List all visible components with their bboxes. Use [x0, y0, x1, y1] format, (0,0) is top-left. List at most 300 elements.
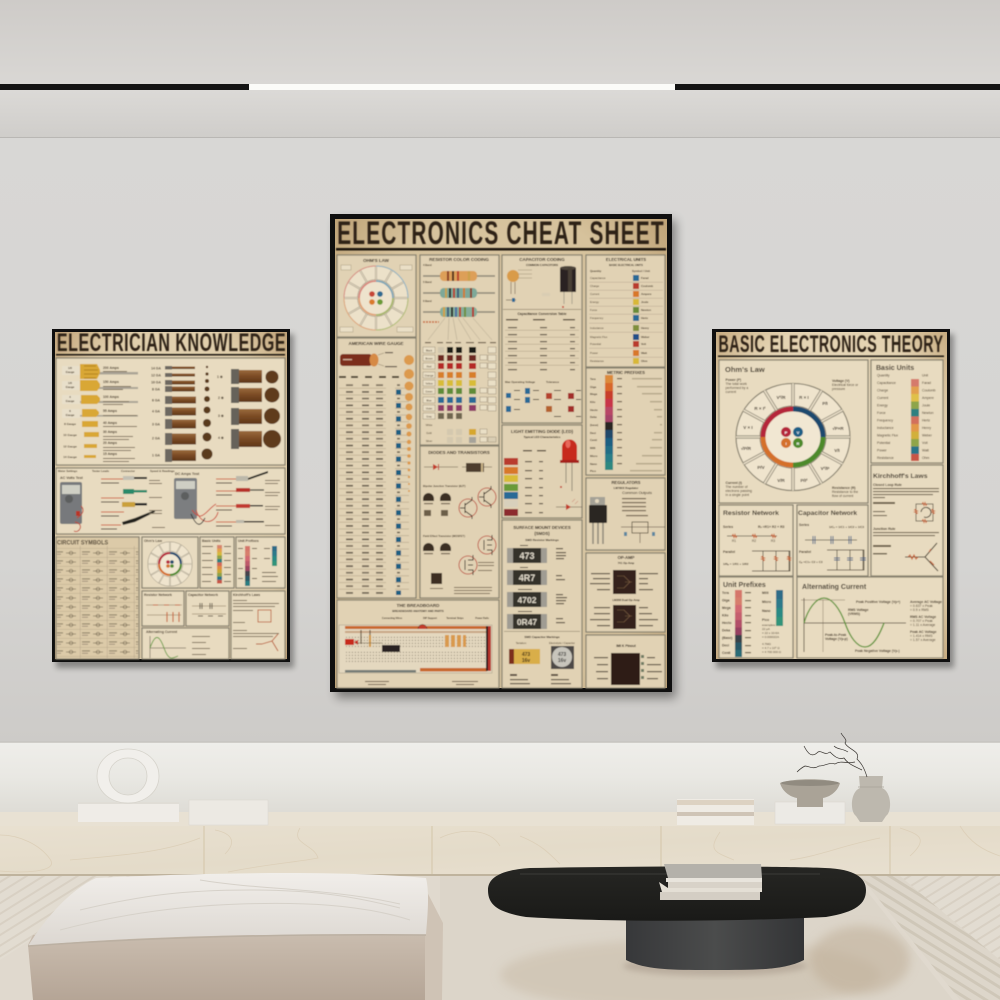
- panel: unit prefixes: = 4.7 x 10⁶ Ω: [762, 646, 780, 650]
- title: BASIC ELECTRONICS THEORY: [718, 331, 944, 358]
- LED: [556, 440, 582, 510]
- panel: metric prefixes: Micro: [590, 454, 598, 458]
- panel: unit prefixes: Giga: [722, 598, 730, 602]
- copper wire gauge column: 8 GA: [152, 388, 161, 392]
- panel: metric prefixes: Kilo: [590, 400, 596, 404]
- panel: electrical units: Hertz: [641, 316, 649, 320]
- panel: LED: [502, 425, 582, 518]
- panel: surface mount devices: SURFACE MOUNT DEVICES: [513, 525, 571, 530]
- panel: LED: LIGHT EMITTING DIODE (LED): [511, 429, 574, 434]
- panel: electrical units: Weber: [641, 335, 650, 339]
- panel: LED: Typical LED Characteristics: [524, 435, 561, 439]
- tantalum capacitor: [509, 649, 540, 664]
- colour table: Red: [427, 364, 432, 368]
- panel: American wire gauge: [337, 338, 416, 598]
- panel: capacitor coding: Capacitance Conversion Table: [517, 312, 567, 316]
- panel: 555 timer: IMI K Pinout: [616, 644, 637, 648]
- panel: unit prefixes: = 0.000022A: [762, 635, 779, 639]
- SMD resistor 4R7: [507, 570, 547, 585]
- panel: surface mount devices: Electrolytic / Capacitor: [549, 641, 575, 645]
- panel: unit prefixes: Pico: [762, 618, 769, 622]
- decor: ring sculpture on marble block: [78, 749, 179, 822]
- panel: capacitor network: Parallel: [799, 550, 811, 554]
- panel: capacitor network: [797, 505, 868, 576]
- TO-220 regulator: [589, 497, 607, 544]
- panel: unit prefixes: Hecto: [722, 621, 731, 625]
- yellow wire column: 14 Gauge: [63, 455, 77, 459]
- panel: capacitor network: Series: [799, 523, 809, 527]
- resistors: [423, 263, 496, 343]
- panel: basic units: [871, 360, 943, 463]
- panel: op-amp: [586, 553, 665, 632]
- panel: electrical units: Watt: [641, 351, 647, 355]
- panel: basic units: Frequency: [877, 418, 893, 422]
- panel: basic units: Ampere: [922, 396, 934, 400]
- panel: diodes and transistors: [420, 446, 499, 598]
- panel: capacitor coding: CAPACITOR CODING: [519, 257, 565, 262]
- panel: capacitor coding: COMMON CAPACITORS: [526, 263, 558, 267]
- panel: capacitor network: Cₚ =C1+ C2 + C3: [799, 560, 823, 564]
- panel: mini alternating current: [142, 628, 229, 659]
- yellow wire column: 40 Amps: [103, 421, 117, 425]
- panel: metric prefixes: Mega: [590, 392, 598, 396]
- yellow wire column: 10 Gauge: [63, 433, 77, 437]
- panel: alternating current: [797, 577, 943, 658]
- colour table: [423, 347, 496, 443]
- panel: Ohm's law: Ohm's Law: [725, 365, 765, 374]
- panel: electrical units: Ampere: [641, 292, 652, 296]
- copper wire gauge column: 6 GA: [152, 398, 161, 402]
- panel: metric prefixes: (base): [590, 423, 598, 427]
- SMD resistor 4R7: 4R7: [519, 573, 535, 583]
- panel: unit prefixes: Milli: [762, 591, 769, 595]
- panel: Ohm's law: Electrical force or: [832, 383, 859, 387]
- decor: stacked books on shelf: [677, 799, 754, 825]
- copper wire gauge column: 14 GA: [151, 366, 161, 370]
- panel: the breadboard: Connecting Wires: [382, 617, 403, 620]
- panel: op-amp: LM358 Dual Op-Amp: [612, 598, 640, 602]
- panel: metric prefixes: METRIC PREFIXES: [607, 370, 645, 375]
- panel: basic units: Henry: [922, 426, 931, 430]
- panel: resistor network: R2: [752, 539, 756, 543]
- panel: Ohm's law: flow of current: [832, 494, 853, 498]
- panel: basic units: Hertz: [922, 418, 930, 422]
- panel: 555 timer: [586, 635, 665, 688]
- yellow wire column: 4: [69, 395, 71, 399]
- marble cabinet: [0, 812, 1000, 876]
- decor: white block: [189, 800, 268, 825]
- Ohm's law wheel: V²/R: [776, 395, 786, 400]
- panel: basic units: Weber: [922, 434, 933, 438]
- Ohm's law wheel: V/R: [777, 478, 785, 483]
- title: ELECTRICIAN KNOWLEDGE: [57, 330, 286, 357]
- panel: basic units: Inductance: [877, 426, 894, 430]
- panel: electrical units: Coulomb: [641, 284, 653, 288]
- colour table: Gold: [426, 431, 432, 435]
- panel: electrical units: Newton: [641, 308, 651, 312]
- AC sine chart: = 0.9 x RMS: [910, 608, 929, 612]
- colour table: Gray: [426, 414, 433, 418]
- Ohm's law wheel: I: [785, 441, 787, 446]
- pouf: [28, 873, 443, 1000]
- poster: Electrician Knowledge: [52, 329, 294, 668]
- panel: basic units: Current: [877, 396, 888, 400]
- yellow wire column: Gauge: [66, 413, 75, 417]
- panel: unit prefixes: = 4 700 000 Ω: [762, 650, 782, 654]
- panel: Ohm's law: current: [726, 390, 736, 394]
- panel: electrical units: Magnetic Flux: [590, 335, 608, 339]
- copper wire gauge column: 4 GA: [152, 410, 161, 414]
- copper wire gauge column: 1 ⊕: [217, 375, 223, 379]
- panel: electrical units: Ohm: [641, 359, 648, 363]
- panel: basic units: Watt: [922, 448, 929, 452]
- panel: Ohm's law: in a single point: [726, 493, 749, 497]
- copper wire gauge column: 10 GA: [151, 380, 161, 384]
- panel: regulators: LM78XX Regulator: [614, 486, 639, 490]
- diode: [424, 463, 492, 472]
- AC sine chart: (VRMS): [848, 612, 860, 616]
- connectors: [122, 471, 268, 525]
- panel: the breadboard: Terminal Strips: [446, 617, 464, 620]
- panel: alternating current: Alternating Current: [802, 584, 867, 591]
- panel: resistor network: Rₛ =R1+ R2 + R3: [758, 525, 785, 529]
- panel: electrical units: Henry: [641, 326, 649, 330]
- panel: multimeter tests: Tester Leads: [92, 469, 109, 473]
- panel: Kirchhoff's laws: [871, 465, 943, 576]
- AC sine chart: = 1.57 x Average: [910, 638, 936, 642]
- yellow wire column: 8 Gauge: [64, 422, 76, 426]
- panel: resistor network: R3: [771, 539, 775, 543]
- meter: AC: [60, 482, 83, 532]
- copper wire gauge column: [151, 366, 224, 462]
- panel: capacitor network: Capacitor Network: [798, 510, 857, 517]
- resistors: 5 Band: [423, 280, 432, 284]
- SMD resistor 4702: 4702: [518, 595, 537, 605]
- panel: metric prefixes: Hecto: [590, 408, 598, 412]
- poster: Basic Electronics Theory: [712, 329, 954, 668]
- panel: metric prefixes: Tera: [590, 377, 596, 381]
- Ohm's law wheel: V²/P: [821, 466, 829, 471]
- panel: basic units: Newton: [922, 411, 934, 415]
- yellow wire column: Gauge: [66, 399, 75, 403]
- panel: electrical units: Capacitance: [590, 276, 606, 280]
- tantalum capacitor: 16v: [522, 658, 530, 664]
- panel: mini Ohm's law: [142, 537, 198, 588]
- SMD resistor 0R47: 0R47: [517, 617, 537, 627]
- panel: electrical units: Quantity: [590, 269, 602, 273]
- test leads: [101, 479, 238, 529]
- panel: Ohm's law: The total work: [726, 382, 747, 386]
- colour table: White: [426, 423, 433, 427]
- panel: regulators: [586, 478, 665, 550]
- colour table: Blue: [426, 398, 432, 402]
- shelf area: lit cove: [0, 742, 1000, 812]
- panel: electrical units: Force: [590, 308, 598, 312]
- panel: circuit symbols: CIRCUIT SYMBOLS: [57, 540, 108, 547]
- panel: electrical units: Symbol / Unit: [632, 269, 650, 273]
- panel: resistor colour coding: RESISTOR COLOR CODING: [429, 257, 489, 262]
- panel: mini Kirchhoff's laws: Kirchhoff's Laws: [233, 593, 260, 597]
- panel: regulators: REGULATORS: [612, 480, 641, 485]
- panel: electrical units: Farad: [641, 276, 649, 280]
- panel: Ohm's law: The number of: [726, 485, 748, 489]
- AC sine chart: RMS AC Voltage: [910, 615, 936, 619]
- panel: multimeter tests: DC Amps Test: [175, 472, 200, 476]
- panel: Ohm's law: OHM'S LAW: [363, 258, 390, 263]
- panel: surface mount devices: (SMDS): [534, 531, 550, 536]
- panel: capacitor coding: Max Operating Voltage: [505, 380, 536, 384]
- panel: surface mount devices: Tantalum: [516, 641, 526, 645]
- yellow wire column: 1/0: [68, 366, 72, 370]
- panel: electrical units: Potential: [590, 342, 601, 346]
- tantalum capacitor: 473: [522, 652, 530, 658]
- panel: electrical units: Current: [590, 292, 600, 296]
- panel: op-amp: 741 Op-Amp: [618, 561, 635, 565]
- AC sine chart: = 1.11 x Average: [910, 623, 935, 627]
- panel: mini capacitor network: Capacitor Network: [188, 593, 218, 597]
- electrolytic capacitor: 473: [558, 652, 566, 658]
- yellow wire column: [62, 364, 138, 462]
- panel: Ohm's law: [719, 360, 868, 503]
- colour table: Brown: [425, 356, 433, 360]
- resistors: 4 Band: [423, 263, 432, 267]
- copper wire gauge column: 1 GA: [152, 454, 161, 458]
- panel: electrical units: Energy: [590, 300, 599, 304]
- panel: metric prefixes: Deci: [590, 431, 596, 435]
- panel: Kirchhoff's laws: Junction Rule: [873, 527, 896, 531]
- panel: metric prefixes: Centi: [590, 438, 597, 442]
- panel: metric prefixes: Giga: [590, 385, 597, 389]
- panel: multimeter tests: Meter Settings: [58, 469, 78, 473]
- panel: Ohm's law: [337, 255, 416, 337]
- wire thickness circles: [404, 355, 414, 492]
- AC sine chart: Peak-to-Peak: [825, 633, 846, 637]
- AC sine chart: = 0.707 x Peak: [910, 619, 933, 623]
- panel: unit prefixes: 4.7MΩ: [762, 642, 772, 646]
- yellow wire column: 200 Amps: [103, 366, 119, 370]
- Ohm's law wheel: R × I: [799, 395, 809, 400]
- panel: Ohm's law: Resistance to the: [832, 490, 858, 494]
- panel: unit prefixes: Deci: [722, 644, 729, 648]
- panel: mini Kirchhoff's laws: [231, 591, 285, 659]
- panel: unit prefixes: (Base): [722, 636, 732, 640]
- colour table: Black: [426, 348, 433, 352]
- panel: multimeter tests: Speed & Readings: [150, 469, 175, 473]
- panel: electrical units: Frequency: [590, 316, 604, 320]
- yellow wire column: 30 Amps: [103, 430, 117, 434]
- panel: Ohm's law: Resistance (R): [832, 486, 856, 490]
- Ohm's law wheel: V/I: [834, 448, 840, 453]
- Ohm's law wheel: V: [797, 430, 800, 435]
- panel: unit prefixes: Deka: [722, 628, 730, 632]
- panel: unit prefixes: Mega: [722, 606, 731, 610]
- meter: DC: [174, 478, 218, 524]
- panel: resistor network: Series: [723, 525, 733, 529]
- junction diagram: [905, 543, 938, 571]
- panel: Ohm's law: Power (P): [726, 378, 741, 382]
- panel: Ohm's law: pressure: [832, 387, 845, 391]
- floor and rug: [0, 876, 1000, 1000]
- panel: electrical units: Resistance: [590, 359, 604, 363]
- panel: resistor network: Parallel: [723, 550, 735, 554]
- panel: electrical units: [586, 255, 665, 367]
- yellow wire column: 12 Gauge: [63, 444, 77, 448]
- panel: surface mount devices: [502, 520, 582, 688]
- panel: capacitor network: 1/Cₛ = 1/C1 + 1/C2 + 1/C3: [829, 525, 864, 529]
- panel: basic units: Energy: [877, 404, 888, 408]
- panel: mini capacitor network: [186, 591, 229, 626]
- colour table: Green: [425, 390, 433, 394]
- panel: mini unit prefixes: [236, 537, 285, 588]
- yellow wire column: Gauge: [66, 385, 75, 389]
- panel: multimeter tests: [56, 468, 285, 534]
- panel: basic units: Coulomb: [922, 388, 936, 392]
- board: [339, 625, 492, 673]
- SMD resistor 0R47: [507, 614, 547, 629]
- decor: box with bowl: [775, 779, 845, 824]
- colour table: Silver: [426, 439, 432, 443]
- panel: Kirchhoff's laws: Closed Loop Rule: [873, 483, 902, 487]
- large copper cable column: [231, 369, 281, 449]
- panel: resistor colour coding: [420, 255, 499, 445]
- Ohm's law wheel: P/I: [822, 401, 828, 406]
- panel: mini basic units: [200, 537, 234, 588]
- AC sine chart: = 1.414 x RMS: [910, 634, 933, 638]
- yellow wire column: 100 Amps: [103, 395, 119, 399]
- copper wire gauge column: 2 GA: [152, 436, 161, 440]
- panel: unit prefixes: Micro: [762, 600, 771, 604]
- panel: diodes and transistors: DIODES AND TRANSISTORS: [428, 450, 490, 455]
- panel: basic units: Magnetic Flux: [877, 434, 898, 438]
- panel: mini resistor network: [142, 591, 184, 626]
- colour table: Yellow: [425, 382, 433, 386]
- panel: the breadboard: Power Rails: [475, 617, 489, 620]
- panel: electrical units: Charge: [590, 284, 600, 288]
- panel: electrical units: BASIC ELECTRICAL UNITS: [609, 263, 643, 267]
- yellow wire column: 150 Amps: [103, 380, 119, 384]
- panel: mini resistor network: Resistor Network: [144, 593, 172, 597]
- panel: basic units: Basic Units: [876, 365, 914, 372]
- books on table: [659, 864, 762, 900]
- panel: unit prefixes: [719, 577, 793, 658]
- panel: Kirchhoff's laws: Kirchhoff's Laws: [873, 473, 928, 480]
- yellow wire column: 6: [69, 409, 71, 413]
- SMD resistor 473: 473: [519, 551, 535, 561]
- panel: the breadboard: THE BREADBOARD: [397, 603, 440, 608]
- panel: diodes and transistors: Bipolar Junction Transistor (BJT): [423, 484, 466, 488]
- panel: basic units: Ohm: [922, 456, 930, 460]
- Ohm's law wheel: P/V: [757, 465, 765, 470]
- panel: basic units: Charge: [877, 388, 888, 392]
- panel: multimeter tests: Connector: [121, 469, 136, 473]
- panel: multimeter tests: AC Volts Test: [60, 476, 84, 480]
- poster: Electronics Cheat Sheet: [330, 214, 676, 698]
- panel: American wire gauge: AMERICAN WIRE GAUGE: [348, 341, 404, 346]
- panel: basic units: Unit: [922, 374, 928, 378]
- copper wire gauge column: 3 ⊕: [218, 414, 224, 418]
- copper wire gauge column: 12 GA: [151, 374, 161, 378]
- Ohm's law wheel: P: [785, 430, 788, 435]
- Ohm's law wheel: √P/R: [741, 446, 752, 451]
- panel: unit prefixes: Nano: [762, 609, 770, 613]
- panel: unit prefixes: = 22 x 10-6A: [762, 631, 779, 635]
- panel: the breadboard: [337, 600, 499, 688]
- panel: resistor network: Resistor Network: [723, 510, 779, 517]
- title: ELECTRONICS CHEAT SHEET: [337, 216, 665, 251]
- colour table: Orange: [425, 374, 434, 378]
- AC sine chart: Average AC Voltage: [910, 600, 942, 604]
- LED colour table: [504, 450, 546, 516]
- panel: metric prefixes: Milli: [590, 446, 596, 450]
- panel: electrical units: Inductance: [590, 326, 604, 330]
- panel: unit prefixes: Centi: [722, 651, 731, 655]
- panel: unit prefixes: Kilo: [722, 614, 728, 618]
- AC sine chart: Peak Positive Voltage (Vp+): [856, 600, 900, 604]
- Ohm's law wheel: √P×R: [832, 426, 844, 431]
- decor: vase with branches: [797, 733, 890, 822]
- panel: basic units: Quantity: [877, 374, 890, 378]
- loop circuit: [914, 502, 934, 522]
- coffee table: [488, 866, 866, 976]
- AC sine chart: Peak AC Voltage: [910, 630, 937, 634]
- panel: basic units: Capacitance: [877, 381, 896, 385]
- panel: basic units: Joule: [922, 404, 930, 408]
- panel: mini unit prefixes: Unit Prefixes: [238, 539, 259, 543]
- panel: surface mount devices: SMD Capacitor Markings: [524, 635, 560, 639]
- panel: basic units: Force: [877, 411, 886, 415]
- AC sine chart: Peak Negative Voltage (Vp-): [855, 649, 900, 653]
- panel: electrical units: Power: [590, 351, 598, 355]
- yellow wire column: 15 Amps: [103, 452, 117, 456]
- yellow wire column: 20 Amps: [103, 441, 117, 445]
- electrolytic capacitor: 16v: [558, 658, 566, 664]
- panel: metric prefixes: Pico: [590, 469, 596, 473]
- panel: Ohm's law: performed by a: [726, 386, 748, 390]
- copper wire gauge column: 3 GA: [152, 422, 161, 426]
- panel: resistor network: R1: [732, 539, 736, 543]
- ceiling light strip: [0, 84, 1000, 90]
- panel: circuit symbols: [56, 537, 139, 659]
- panel: metric prefixes: Deka: [590, 415, 597, 419]
- transistors: [459, 486, 496, 575]
- electrolytic capacitor: [551, 646, 574, 669]
- panel: unit prefixes: 22 μA: [762, 627, 770, 631]
- panel: Ohm's law: electrons passing: [726, 489, 752, 493]
- panel: the breadboard: BREADBOARD ANATOMY AND PARTS: [392, 609, 444, 613]
- panel: electrical units: ELECTRICAL UNITS: [606, 257, 646, 262]
- yellow wire column: Gauge: [66, 370, 75, 374]
- panel: unit prefixes: Unit Prefixes: [723, 582, 766, 589]
- SMD resistor 473: [507, 548, 547, 563]
- panel: capacitor coding: [502, 255, 582, 423]
- Ohm's law wheel: V × I: [743, 425, 753, 430]
- panel: mini Ohm's law: Ohm's Law: [144, 539, 162, 543]
- panel: unit prefixes: examples:: [762, 623, 776, 627]
- panel: resistor network: [719, 505, 793, 576]
- Ohm's law wheel: [736, 383, 850, 491]
- panel: op-amp: OP-AMP: [618, 555, 635, 560]
- yellow wire column: 55 Amps: [103, 409, 117, 413]
- panel: metric prefixes: [586, 368, 665, 475]
- panel: mini alternating current: Alternating Current: [146, 630, 178, 634]
- panel: Ohm's law: Voltage (V): [832, 379, 849, 383]
- panel: surface mount devices: SMD Resistor Markings: [525, 538, 559, 542]
- panel: metric prefixes: Nano: [590, 462, 597, 466]
- panel: unit prefixes: Tera: [722, 591, 729, 595]
- TO-92 packages: [423, 493, 451, 551]
- panel: basic units: Potential: [877, 441, 890, 445]
- panel: diodes and transistors: Field Effect Transistor (MOSFET): [423, 534, 465, 538]
